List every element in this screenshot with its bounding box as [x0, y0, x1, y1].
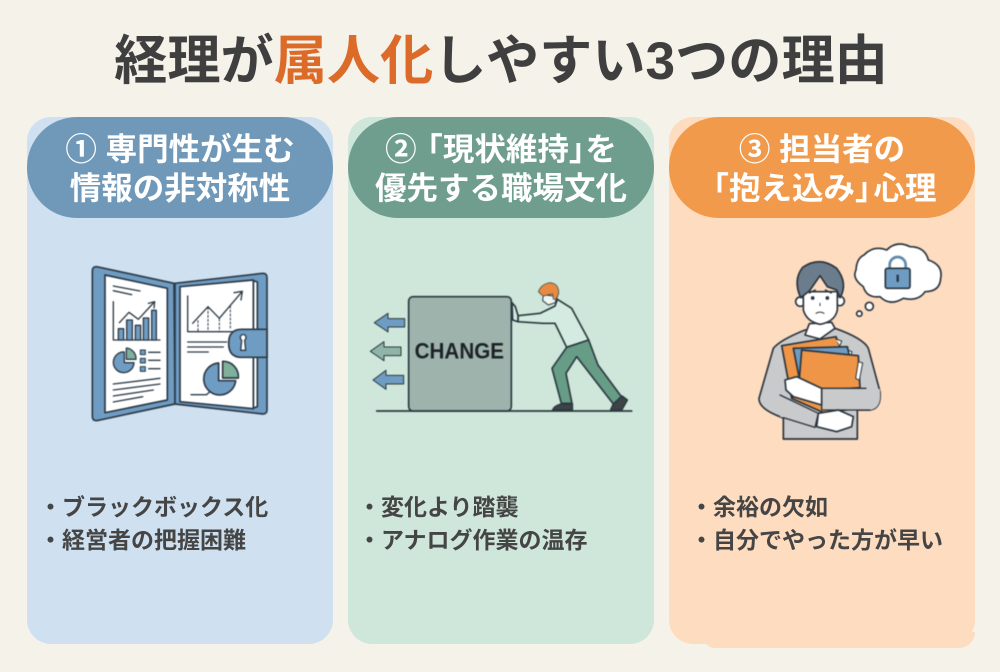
- heading: status quo culture: 優先する職場文化: [375, 170, 627, 206]
- bullet list: [690, 494, 943, 552]
- heading: status quo culture: [348, 117, 654, 218]
- heading: information asymmetry: 情報の非対称性: [70, 170, 290, 206]
- heading: information asymmetry: [27, 117, 333, 218]
- bullet list: [39, 494, 268, 552]
- icon: locked ledger book: [90, 265, 269, 422]
- panel: hoarding mentality: [669, 117, 975, 644]
- bullet list: ・自分でやった方が早い: [690, 526, 943, 552]
- illustration: worried person hugging folders with lock thought bubble: [757, 242, 943, 441]
- heading: hoarding mentality: 「抱え込み」心理: [697, 170, 937, 206]
- bullet list: [358, 494, 588, 552]
- bullet list: ・経営者の把握困難: [39, 526, 246, 552]
- panel bottom edge overhang: [705, 632, 975, 648]
- label: CHANGE: CHANGE: [415, 339, 504, 364]
- bullet list: ・アナログ作業の温存: [358, 526, 588, 552]
- bullet list: ・余裕の欠如: [690, 494, 828, 520]
- heading: hoarding mentality: ③ 担当者の: [739, 131, 905, 167]
- heading: hoarding mentality: [669, 117, 975, 218]
- heading: information asymmetry: ① 専門性が生む: [65, 131, 295, 167]
- panel: status quo culture: [348, 117, 654, 644]
- bullet list: ・変化より踏襲: [358, 494, 519, 520]
- panel: information asymmetry: [27, 117, 333, 644]
- bullet list: ・ブラックボックス化: [39, 494, 268, 520]
- title: 経理が属人化しやすい3つの理由: [114, 32, 888, 91]
- heading: status quo culture: ② 「現状維持」を: [385, 131, 617, 167]
- illustration: person pushing CHANGE block: [369, 282, 633, 413]
